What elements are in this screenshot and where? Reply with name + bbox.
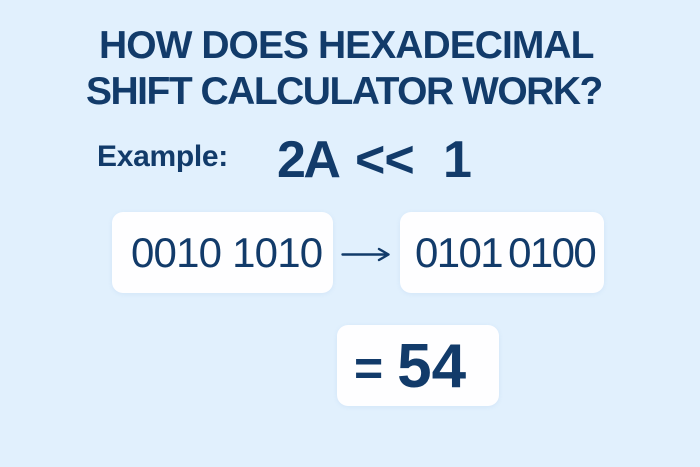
panel: input binary (112, 212, 333, 293)
panel: shifted binary (400, 212, 604, 293)
title (86, 24, 602, 113)
input binary value: 0010 1010 (131, 229, 322, 276)
arrow (341, 248, 390, 262)
expression: 1 (443, 131, 472, 189)
expression: << (355, 131, 414, 189)
title line 1: HOW DOES HEXADECIMAL (99, 24, 594, 67)
example label: Example: (97, 140, 228, 173)
expression (277, 131, 472, 189)
result value: = 54 (354, 332, 466, 401)
expression: 2A (277, 131, 337, 189)
panel: result (337, 325, 499, 406)
shifted binary value: 0101 0100 (415, 229, 595, 276)
title line 2: SHIFT CALCULATOR WORK? (86, 70, 602, 113)
